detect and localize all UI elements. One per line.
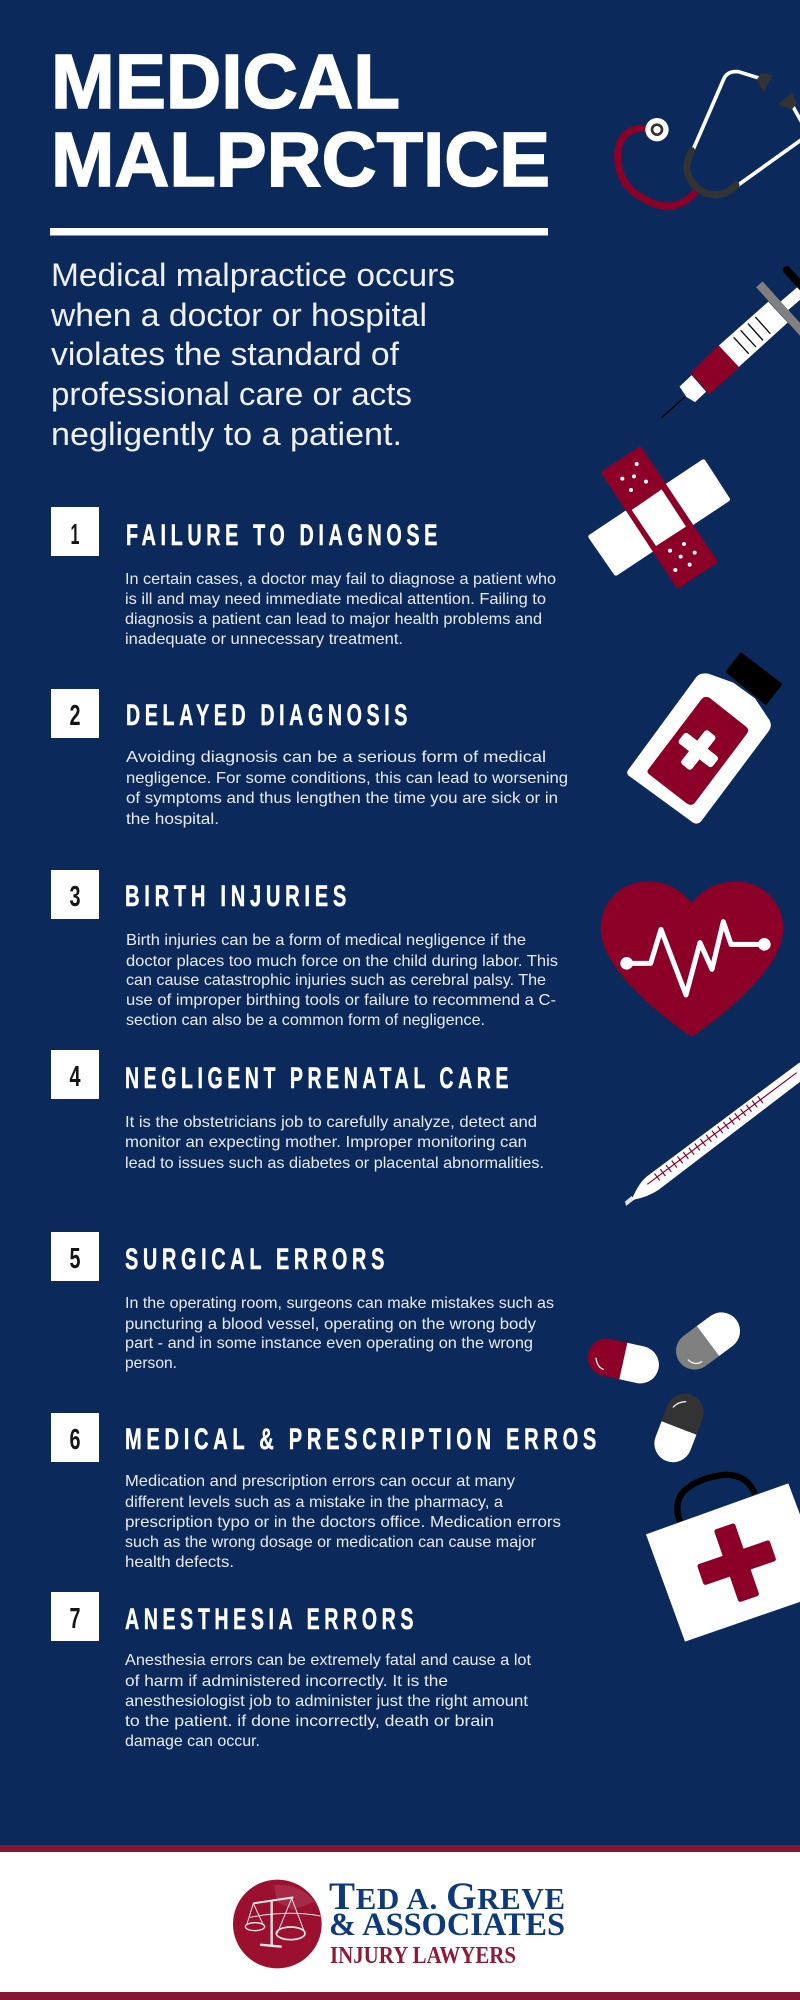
body 6: such as the wrong dosage or medication can cause major: [125, 1534, 537, 1551]
number box 1: 1: [70, 519, 80, 551]
number box 3: 3: [70, 881, 80, 913]
number box 4: [51, 1050, 99, 1099]
intro text: when a doctor or hospital: [50, 297, 427, 333]
body 5: part - and in some instance even operating on the wrong: [125, 1335, 533, 1352]
grey pill: [669, 1305, 747, 1377]
intro text: negligently to a patient.: [51, 416, 402, 452]
body 3: doctor places too much force on the child during labor. This: [126, 953, 558, 970]
body 4: It is the obstetricians job to carefully analyze, detect and: [125, 1114, 537, 1131]
title rule: [50, 228, 548, 236]
body 1: diagnosis a patient can lead to major health problems and: [125, 611, 542, 628]
number box 1: [51, 507, 99, 556]
body 5: [125, 1295, 554, 1372]
body 6: prescription typo or in the doctors office. Medication errors: [125, 1514, 561, 1531]
intro text: violates the standard of: [51, 336, 399, 372]
title: MALPRCTICE: [51, 117, 550, 203]
intro text: professional care or acts: [51, 376, 412, 412]
intro text: Medical malpractice occurs: [51, 257, 455, 293]
body 5: person.: [125, 1355, 177, 1372]
logo: firm name: TED A. GREVE: [329, 1875, 565, 1918]
panel: item 3 birth injuries: [51, 870, 558, 1029]
icon: bandage: [591, 449, 728, 586]
icon: heart with pulse: [601, 882, 783, 1037]
body 5: puncturing a blood vessel, operating on the wrong body: [125, 1316, 536, 1333]
panel: item 4 negligent prenatal care: [51, 1050, 544, 1172]
body 2: the hospital.: [126, 811, 219, 828]
body 7: anesthesiologist job to administer just the right amount: [125, 1693, 529, 1710]
body 6: Medication and prescription errors can occur at many: [125, 1473, 515, 1490]
body 7: damage can occur.: [125, 1733, 260, 1750]
icon: thermometer: [625, 1061, 800, 1206]
number box 2: 2: [70, 700, 80, 732]
number box 2: [51, 689, 99, 738]
icon: medicine bottle: [627, 654, 780, 824]
panel: item 1 failure to diagnose: [51, 507, 556, 648]
number box 5: 5: [70, 1243, 80, 1275]
number box 4: 4: [70, 1061, 80, 1093]
body 4: [125, 1114, 544, 1172]
icon: pills: [584, 1305, 747, 1468]
body 1: In certain cases, a doctor may fail to diagnose a patient who: [125, 571, 556, 588]
body 3: Birth injuries can be a form of medical negligence if the: [126, 932, 526, 949]
body 6: health defects.: [125, 1554, 234, 1571]
number box 6: [51, 1413, 99, 1462]
body 3: section can also be a common form of negligence.: [126, 1012, 485, 1029]
heading 1: FAILURE TO DIAGNOSE: [126, 519, 442, 552]
title: MEDICAL: [51, 39, 400, 125]
number box 6: 6: [70, 1424, 80, 1456]
body 1: [125, 571, 556, 648]
body 3: [126, 932, 558, 1029]
red pill: [584, 1335, 663, 1387]
number box 3: [51, 870, 99, 919]
body 4: monitor an expecting mother. Improper monitoring can: [125, 1134, 527, 1151]
logo: firm name: [329, 1875, 565, 1969]
body 7: Anesthesia errors can be extremely fatal and cause a lot: [125, 1652, 532, 1669]
body 3: use of improper birthing tools or failure to recommend a C-: [126, 992, 556, 1009]
icon: syringe: [662, 270, 800, 418]
logo: scales emblem: [233, 1880, 322, 1968]
body 1: inadequate or unnecessary treatment.: [125, 631, 403, 648]
heading 3: BIRTH INJURIES: [125, 880, 351, 913]
body 1: is ill and may need immediate medical attention. Failing to: [125, 591, 546, 608]
heading 4: NEGLIGENT PRENATAL CARE: [125, 1062, 513, 1095]
panel: item 6 medical and prescription errors: [51, 1413, 601, 1571]
heading 7: ANESTHESIA ERRORS: [125, 1603, 418, 1636]
logo: firm name: INJURY LAWYERS: [330, 1943, 516, 1969]
panel: item 7 anesthesia errors: [51, 1592, 532, 1750]
body 2: negligence. For some conditions, this can lead to worsening: [126, 770, 568, 787]
dark pill: [649, 1388, 709, 1468]
body 7: [125, 1652, 532, 1750]
heading 2: DELAYED DIAGNOSIS: [126, 699, 412, 732]
body 7: to the patient. if done incorrectly, death or brain: [125, 1713, 494, 1730]
body 3: can cause catastrophic injuries such as cerebral palsy. The: [126, 972, 546, 989]
heading 5: SURGICAL ERRORS: [125, 1243, 389, 1276]
icon: stethoscope: [618, 72, 800, 206]
number box 5: [51, 1232, 99, 1281]
body 2: Avoiding diagnosis can be a serious form of medical: [126, 749, 546, 766]
panel: item 2 delayed diagnosis: [51, 689, 568, 828]
body 6: different levels such as a mistake in the pharmacy, a: [125, 1494, 503, 1511]
body 7: of harm if administered incorrectly. It is the: [125, 1673, 448, 1690]
body 2: of symptoms and thus lengthen the time you are sick or in: [126, 790, 558, 807]
body 5: In the operating room, surgeons can make mistakes such as: [125, 1295, 554, 1312]
icon: first aid kit: [646, 1475, 800, 1642]
number box 7: [51, 1592, 99, 1641]
footer band: [0, 1845, 800, 2000]
body 6: [125, 1473, 561, 1571]
body 4: lead to issues such as diabetes or placental abnormalities.: [125, 1155, 544, 1172]
number box 7: 7: [70, 1603, 80, 1635]
body 2: [126, 749, 568, 828]
intro text: [50, 257, 455, 452]
panel: item 5 surgical errors: [51, 1232, 554, 1372]
logo: firm name: & ASSOCIATES: [329, 1907, 565, 1943]
title: [51, 39, 550, 203]
